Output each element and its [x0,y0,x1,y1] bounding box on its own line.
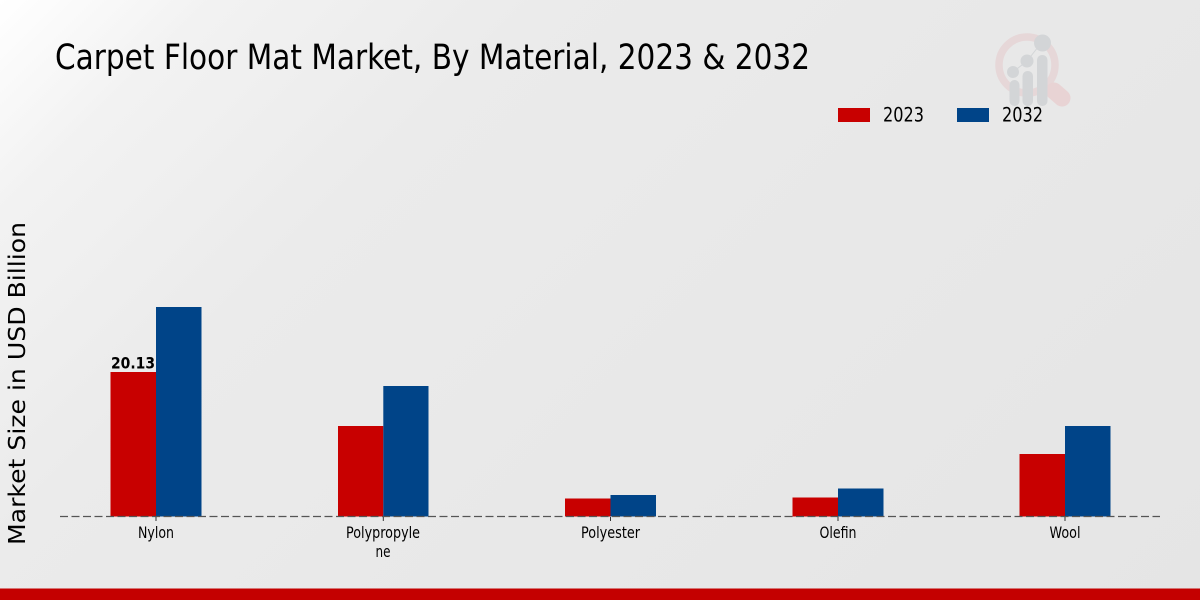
value label: Nylon 2023: 20.13 [111,353,155,372]
x axis labels [138,523,1080,561]
x axis labels: Olefin [820,523,856,542]
legend item: 2032: 2032 [1002,104,1043,126]
bars: Polypropylene [338,386,428,516]
x axis labels: Wool [1050,523,1080,542]
bars: Nylon [110,307,202,516]
bars: Polyester [565,495,656,516]
footer bar [0,588,1200,600]
legend item: 2032 [957,104,1043,126]
bar chart [60,307,1160,521]
icon: watermark logo [999,34,1062,106]
x axis labels: Polyester [581,523,640,542]
legend item: 2023 [838,104,924,126]
title: Carpet Floor Mat Market, By Material, 2023 & 2032 [55,38,810,78]
bars: Olefin [792,488,884,516]
legend [838,104,1043,126]
legend item: 2023: 2023 [883,104,924,126]
bars: Wool [1020,426,1110,516]
x axis labels: ne [376,542,390,561]
x axis labels: Nylon [138,523,174,542]
x axis labels: Polypropyle [346,523,420,542]
y axis label: Market Size in USD Billion [3,222,31,545]
